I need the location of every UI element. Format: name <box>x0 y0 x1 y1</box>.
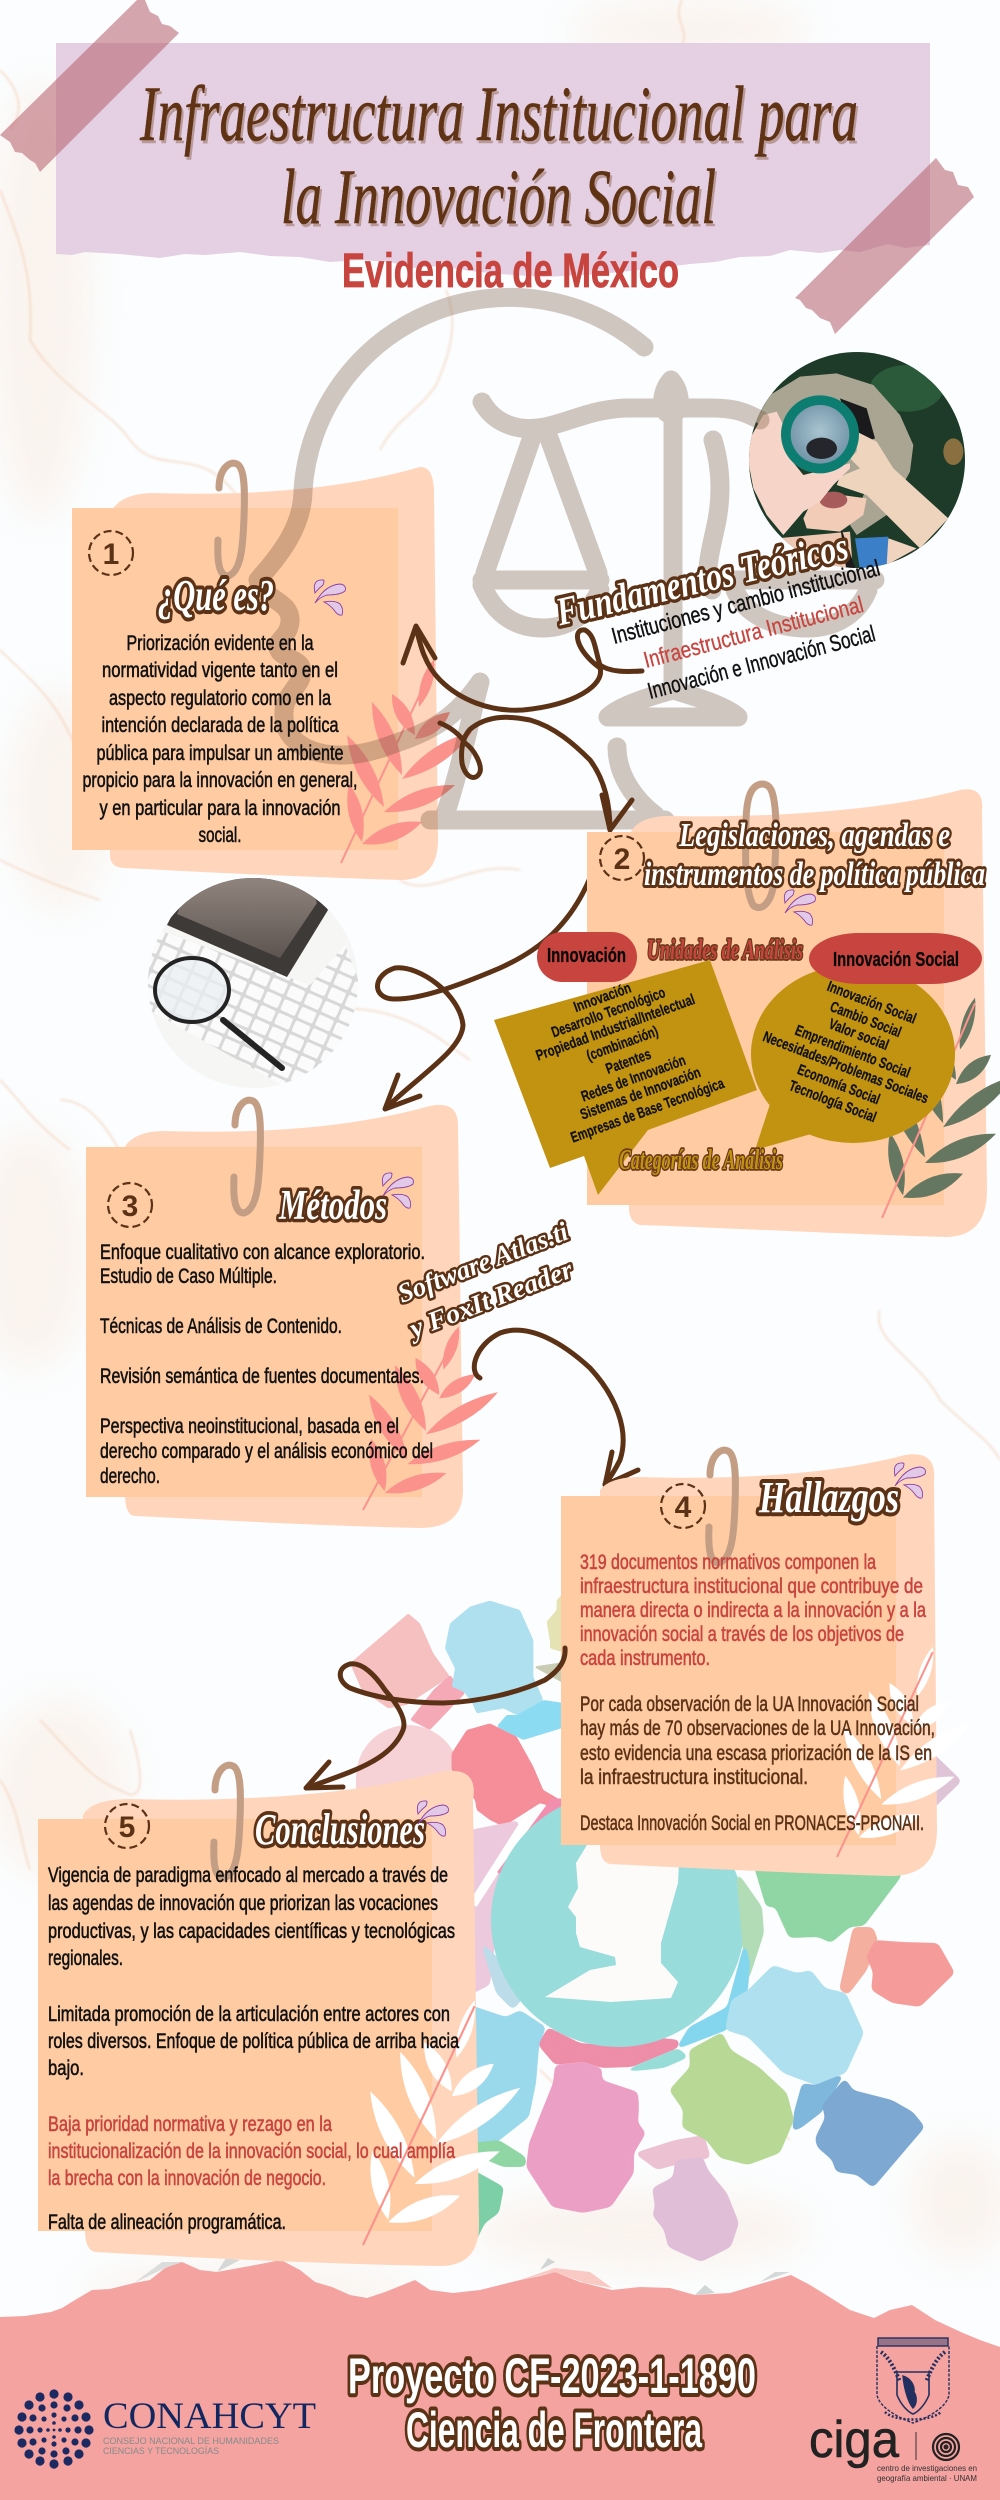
conclusion 4: Falta de alineación programática. <box>48 2211 286 2234</box>
icon: fingerprint <box>933 2434 959 2460</box>
category list: Empresas de Base Tecnológica <box>568 1075 727 1146</box>
heading: fundamentos: Fundamentos Teóricos <box>551 523 852 634</box>
conclusion 2: roles diversos. Enfoque de política pública de arriba hacia <box>48 2030 459 2053</box>
pill: innovacion <box>537 932 637 982</box>
heading: que es: ¿Qué es? <box>158 571 274 620</box>
number 4: 4 <box>675 1491 692 1524</box>
number 5 <box>105 1804 149 1848</box>
label: unidades de analisis: Unidades de Análisis <box>647 935 803 966</box>
center name line 2: geografía ambiental · UNAM <box>877 2473 977 2483</box>
finding 2: la infraestructura institucional. <box>580 1766 808 1789</box>
category list: Patentes <box>603 1046 653 1078</box>
arrow: to que es <box>403 626 642 710</box>
icon: leaf branch <box>341 659 472 863</box>
label: categorias de analisis: Categorías de Análisis <box>619 1145 783 1176</box>
icon: splash <box>382 1173 413 1208</box>
icon: paperclip <box>214 1765 240 1878</box>
icon: leaf branch <box>363 1326 498 1510</box>
panel: conclusiones <box>38 1765 520 2266</box>
divider <box>915 2432 917 2460</box>
number 1 <box>89 531 133 575</box>
pill: innovacion: Innovación <box>547 945 626 967</box>
body text: y en particular para la innovación <box>100 797 340 820</box>
arrow: to metodos <box>377 878 590 1109</box>
category list: Cambio Social <box>828 998 904 1041</box>
logo: unam shield <box>877 2338 949 2423</box>
callout: innovacion social categories <box>751 933 982 1150</box>
icon: paperclip <box>218 463 244 576</box>
body text: Enfoque cualitativo con alcance exploratorio. <box>100 1241 425 1264</box>
category list: Emprendimiento Social <box>793 1022 913 1082</box>
conclusion 1: productivas, y las capacidades científicas y tecnológicas <box>48 1920 455 1943</box>
panel front <box>561 1496 896 1845</box>
body text: Priorización evidente en la <box>126 632 314 655</box>
project title <box>348 2348 756 2458</box>
category list: Innovación <box>571 980 634 1016</box>
finding 1: innovación social a través de los objetivos de <box>580 1623 904 1646</box>
heading: hallazgos: Hallazgos <box>758 1473 899 1522</box>
icon: white branch <box>837 1647 972 1857</box>
number 3: 3 <box>122 1190 138 1223</box>
category list: Propiedad Industrial/Intelectual <box>534 991 697 1064</box>
program name: Ciencia de Frontera <box>406 2402 703 2458</box>
icon: paperclip <box>234 1100 260 1213</box>
panel back <box>110 467 438 880</box>
body text: social. <box>198 824 242 847</box>
label: software: Software Atlas.ti <box>393 1216 573 1309</box>
speech bubble <box>494 960 757 1195</box>
project code: Proyecto CF-2023-1-1890 <box>348 2348 756 2404</box>
title line 2: la Innovación Social <box>281 153 716 240</box>
photo: magnifier on keyboard <box>148 878 358 1088</box>
body text: derecho comparado y el análisis económico del <box>100 1440 433 1463</box>
body text: aspecto regulatorio como en la <box>109 687 331 710</box>
panel: hallazgos <box>561 1450 972 1876</box>
body text: normatividad vigente tanto en el <box>102 659 338 682</box>
panel front <box>86 1147 422 1497</box>
heading: conclusiones: Conclusiones <box>255 1805 425 1854</box>
finding 1 <box>580 1551 926 1670</box>
number 5: 5 <box>119 1811 135 1844</box>
conclusion 1: Vigencia de paradigma enfocado al mercado a través de <box>48 1864 448 1887</box>
illustration: heads <box>350 1590 962 2243</box>
center name: centro de investigaciones en <box>877 2463 977 2473</box>
icon: splash <box>784 890 815 925</box>
item: instituciones: Instituciones y cambio institucional <box>609 555 882 649</box>
icon: dot circle <box>14 2389 94 2469</box>
category list: Sistemas de Innovación <box>578 1064 703 1123</box>
icon: green branch <box>882 998 1000 1218</box>
number 4 <box>661 1484 705 1528</box>
wordmark: ciga <box>809 2411 899 2469</box>
tape: right <box>795 158 974 334</box>
panel: que es <box>72 463 472 880</box>
panel 1 text <box>82 531 358 847</box>
conclusion 1: regionales. <box>48 1947 123 1970</box>
category list: Valor social <box>826 1016 891 1054</box>
icon: paperclip <box>746 784 776 908</box>
category list: Redes de Innovación <box>579 1052 688 1106</box>
conclusion 3: Baja prioridad normativa y rezago en la <box>48 2113 332 2136</box>
photo: child with spyglass <box>749 352 965 568</box>
logo: ciga <box>809 2411 977 2483</box>
panel back <box>83 1771 479 2266</box>
category list: Tecnología Social <box>787 1077 879 1126</box>
icon: paperclip <box>709 1450 735 1563</box>
finding 1: infraestructura institucional que contribuye de <box>580 1575 923 1598</box>
number 2 <box>600 836 644 880</box>
category list <box>760 978 931 1126</box>
conclusion 1: las agendas de innovación que priorizan las vocaciones <box>48 1892 438 1915</box>
icon: balance scale watermark <box>258 297 875 820</box>
panel: legislaciones <box>587 784 1000 1237</box>
category list: Necesidades/Problemas Sociales <box>760 1028 931 1107</box>
category list <box>534 980 727 1146</box>
number 1: 1 <box>103 538 119 571</box>
speech bubble <box>751 965 955 1150</box>
category list: (combinación) <box>584 1023 661 1065</box>
finding 1: 319 documentos normativos componen la <box>580 1551 876 1574</box>
heading: metodos: Métodos <box>278 1183 387 1229</box>
body text: pública para impulsar un ambiente <box>96 742 344 765</box>
pill: innovacion social: Innovación Social <box>833 949 959 971</box>
body text <box>82 632 358 847</box>
body text: propicio para la innovación en general, <box>82 769 358 792</box>
arrow: to conclusiones <box>306 1648 565 1788</box>
body text: derecho. <box>100 1465 160 1488</box>
panel front <box>38 1819 432 2231</box>
conclusion 2: bajo. <box>48 2057 84 2080</box>
conclusion 2 <box>48 2003 459 2080</box>
conclusion 3: la brecha con la innovación de negocio. <box>48 2167 326 2190</box>
wordmark: CONAHCYT <box>103 2396 316 2437</box>
icon: splash <box>894 1463 925 1498</box>
body text: Técnicas de Análisis de Contenido. <box>100 1315 342 1338</box>
pill: innovacion social <box>809 933 982 984</box>
panel back <box>600 1454 937 1876</box>
arrow: to hallazgos <box>474 1330 638 1485</box>
body text: intención declarada de la política <box>102 714 339 737</box>
panel: metodos <box>86 1100 498 1528</box>
illustration: lower heads <box>526 1860 955 2262</box>
logo: conahcyt <box>14 2389 316 2469</box>
council name: CONSEJO NACIONAL DE HUMANIDADES <box>103 2436 279 2447</box>
category list: Innovación Social <box>825 978 919 1028</box>
callout: innovacion categories <box>494 932 757 1195</box>
council name line 2: CIENCIAS Y TECNOLOGÍAS <box>103 2446 219 2457</box>
conclusion 2: Limitada promoción de la articulación entre actores con <box>48 2003 450 2026</box>
illustration: head stripes <box>474 1800 600 1905</box>
subtitle: Evidencia de México <box>342 245 679 298</box>
item: infraestructura: Infraestructura Institucional <box>641 591 866 673</box>
body text: Revisión semántica de fuentes documentales. <box>100 1365 424 1388</box>
label: software: y FoxIt Reader <box>403 1254 577 1345</box>
category list: Desarrollo Tecnológico <box>549 984 668 1041</box>
finding 1: cada instrumento. <box>580 1647 710 1670</box>
icon: splash <box>417 1801 448 1836</box>
icon: splash <box>314 580 345 615</box>
tape: top left <box>0 0 179 172</box>
number 2: 2 <box>614 843 630 876</box>
conclusion 3 <box>48 2113 455 2190</box>
panel back <box>628 789 987 1237</box>
body text <box>100 1241 433 1488</box>
number 3 <box>108 1183 152 1227</box>
category list: Economía Social <box>795 1061 882 1108</box>
icon: white branch <box>363 2000 520 2245</box>
panel front <box>72 508 398 850</box>
panel back <box>123 1105 463 1528</box>
finding 2 <box>580 1693 935 1789</box>
body text: Estudio de Caso Múltiple. <box>100 1265 277 1288</box>
body text: Perspectiva neoinstitucional, basada en el <box>100 1415 399 1438</box>
item: innovacion: Innovación e Innovación Social <box>645 620 878 704</box>
callout: fundamentos teoricos <box>551 523 882 704</box>
illustration: central teal head <box>491 1793 745 2047</box>
header lilac banner <box>56 43 930 277</box>
footer band <box>0 2258 1000 2500</box>
conclusion 1 <box>48 1864 455 1970</box>
conclusion 3: institucionalización de la innovación social, lo cual amplía <box>48 2140 455 2163</box>
panel front <box>587 832 944 1205</box>
arrow: to panel 2 <box>440 717 632 830</box>
title <box>139 70 858 240</box>
